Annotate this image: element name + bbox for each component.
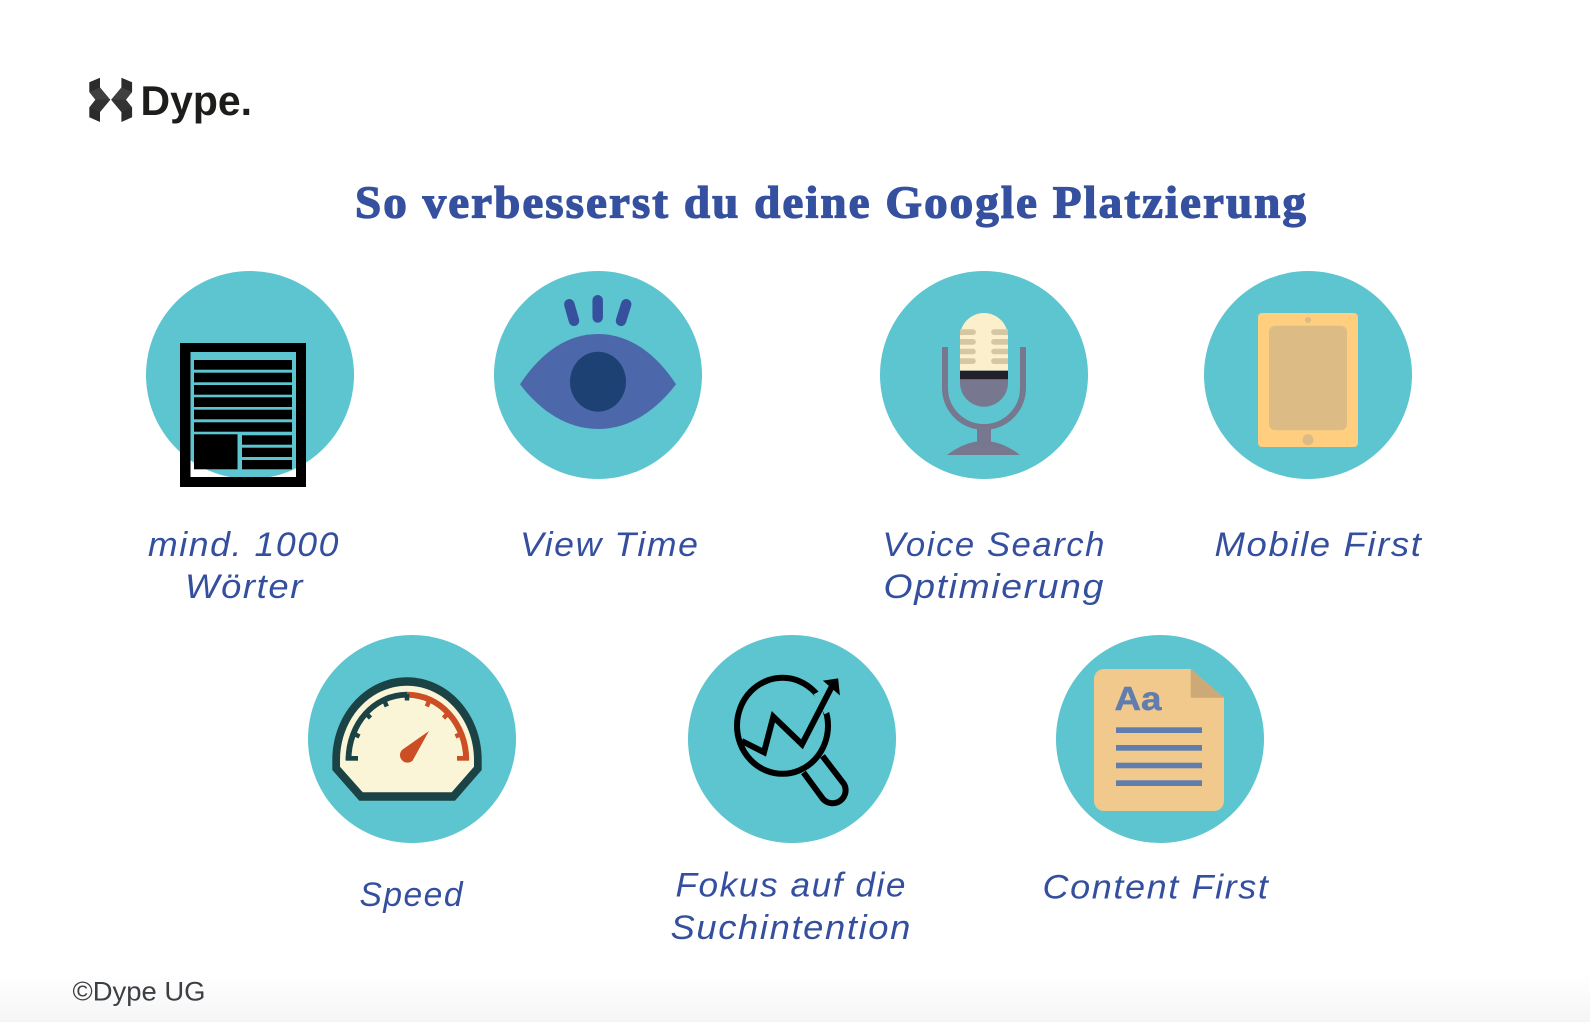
icon: document with text: Aa xyxy=(1114,680,1162,717)
circle background xyxy=(146,271,354,479)
label: Optimierung xyxy=(884,568,1105,606)
logo: Dype xyxy=(89,77,252,124)
label xyxy=(148,526,340,606)
circle background xyxy=(494,271,702,479)
label: mind. 1000 xyxy=(148,526,340,564)
label: Content First xyxy=(1042,869,1270,907)
icon: text document xyxy=(180,343,306,487)
icon: microphone xyxy=(945,313,1023,455)
item: Voice Search Optimierung xyxy=(880,271,1106,606)
icon: Dype mark xyxy=(89,78,132,122)
copyright: ©Dype UG xyxy=(72,976,206,1006)
icon: magnifier with rising chart xyxy=(737,678,846,803)
label: Wörter xyxy=(185,568,304,606)
item: Content First xyxy=(1042,635,1270,907)
title: So verbesserst du deine Google Platzierung xyxy=(355,176,1308,228)
label: Speed xyxy=(360,876,464,914)
item: mind. 1000 Wörter xyxy=(146,271,354,606)
label: View Time xyxy=(520,526,700,564)
icon: speedometer xyxy=(332,677,482,801)
logo wordmark: Dype. xyxy=(140,77,252,124)
label xyxy=(882,526,1106,606)
circle background xyxy=(688,635,896,843)
circle background xyxy=(308,635,516,843)
icon: eye xyxy=(520,300,676,429)
label: Fokus auf die xyxy=(676,867,907,905)
circle background xyxy=(1204,271,1412,479)
item: View Time xyxy=(494,271,702,564)
label: Suchintention xyxy=(670,909,912,947)
item: Mobile First xyxy=(1204,271,1423,564)
label xyxy=(670,867,912,947)
circle background xyxy=(880,271,1088,479)
icon: document with text xyxy=(1094,669,1224,811)
label: Voice Search xyxy=(882,526,1106,564)
circle background xyxy=(1056,635,1264,843)
icon: tablet xyxy=(1258,313,1358,447)
label: Mobile First xyxy=(1214,526,1423,564)
item: Speed xyxy=(308,635,516,914)
item: Fokus auf die Suchintention xyxy=(670,635,912,947)
